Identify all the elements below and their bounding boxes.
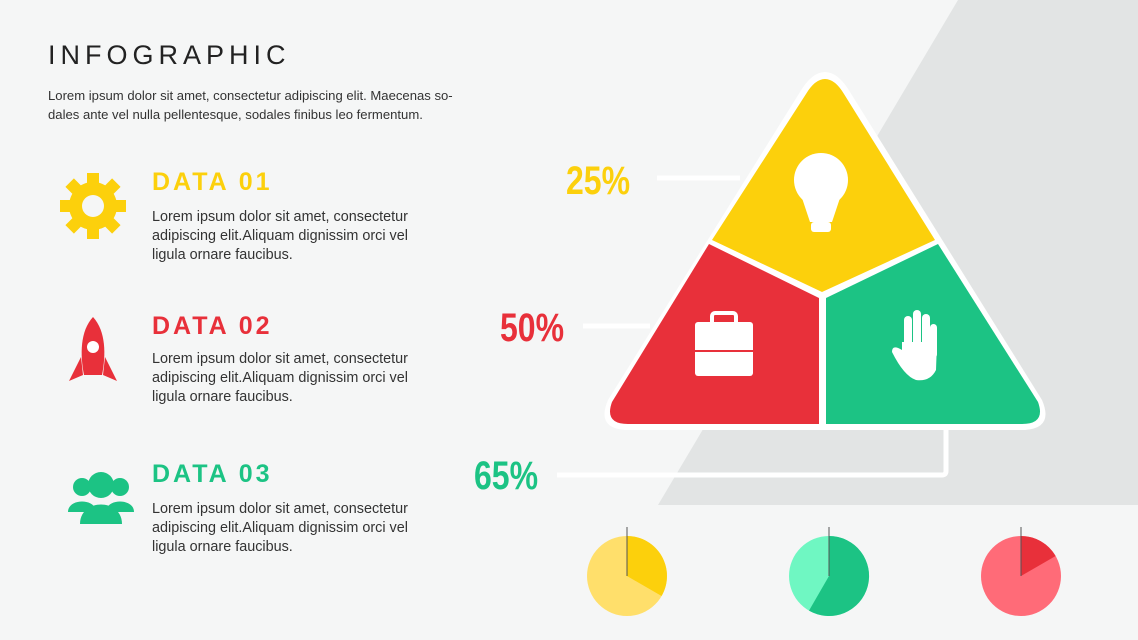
title: INFOGRAPHIC <box>48 40 291 70</box>
pie: yellow <box>587 527 667 616</box>
icon: people <box>68 472 134 524</box>
heading: DATA 02 <box>152 312 273 340</box>
icon: gear <box>60 173 126 239</box>
pie: red <box>981 527 1061 616</box>
pie: green <box>789 527 869 616</box>
segment: green <box>826 244 1040 424</box>
segment: red <box>610 244 819 424</box>
text: Lorem ipsum dolor sit amet, consectetur adipiscing elit.Aliquam dignissim orci vel ligula ornare faucibus. <box>152 351 408 405</box>
text: Lorem ipsum dolor sit amet, consectetur adipiscing elit.Aliquam dignissim orci vel ligula ornare faucibus. <box>152 209 408 263</box>
icon: bulb <box>794 153 848 232</box>
text: Lorem ipsum dolor sit amet, consectetur adipiscing elit.Aliquam dignissim orci vel ligula ornare faucibus. <box>152 501 408 555</box>
percent label 25: 25% <box>566 159 630 203</box>
panel: data 01 <box>60 168 408 263</box>
intro text <box>48 88 453 122</box>
panel: data 02 <box>69 312 408 405</box>
intro text: Lorem ipsum dolor sit amet, consectetur adipiscing elit. Maecenas so- <box>48 88 453 103</box>
icon: briefcase <box>695 313 753 376</box>
icon: rocket <box>69 317 117 381</box>
panel: data 03 <box>68 460 408 555</box>
percent label 50: 50% <box>500 306 564 350</box>
percent label 65: 65% <box>474 454 538 498</box>
icon: hand <box>892 310 937 380</box>
segment: yellow <box>712 79 935 292</box>
heading: DATA 01 <box>152 168 273 196</box>
heading: DATA 03 <box>152 460 273 488</box>
intro text: dales ante vel nulla pellentesque, sodales finibus leo fermentum. <box>48 107 423 122</box>
